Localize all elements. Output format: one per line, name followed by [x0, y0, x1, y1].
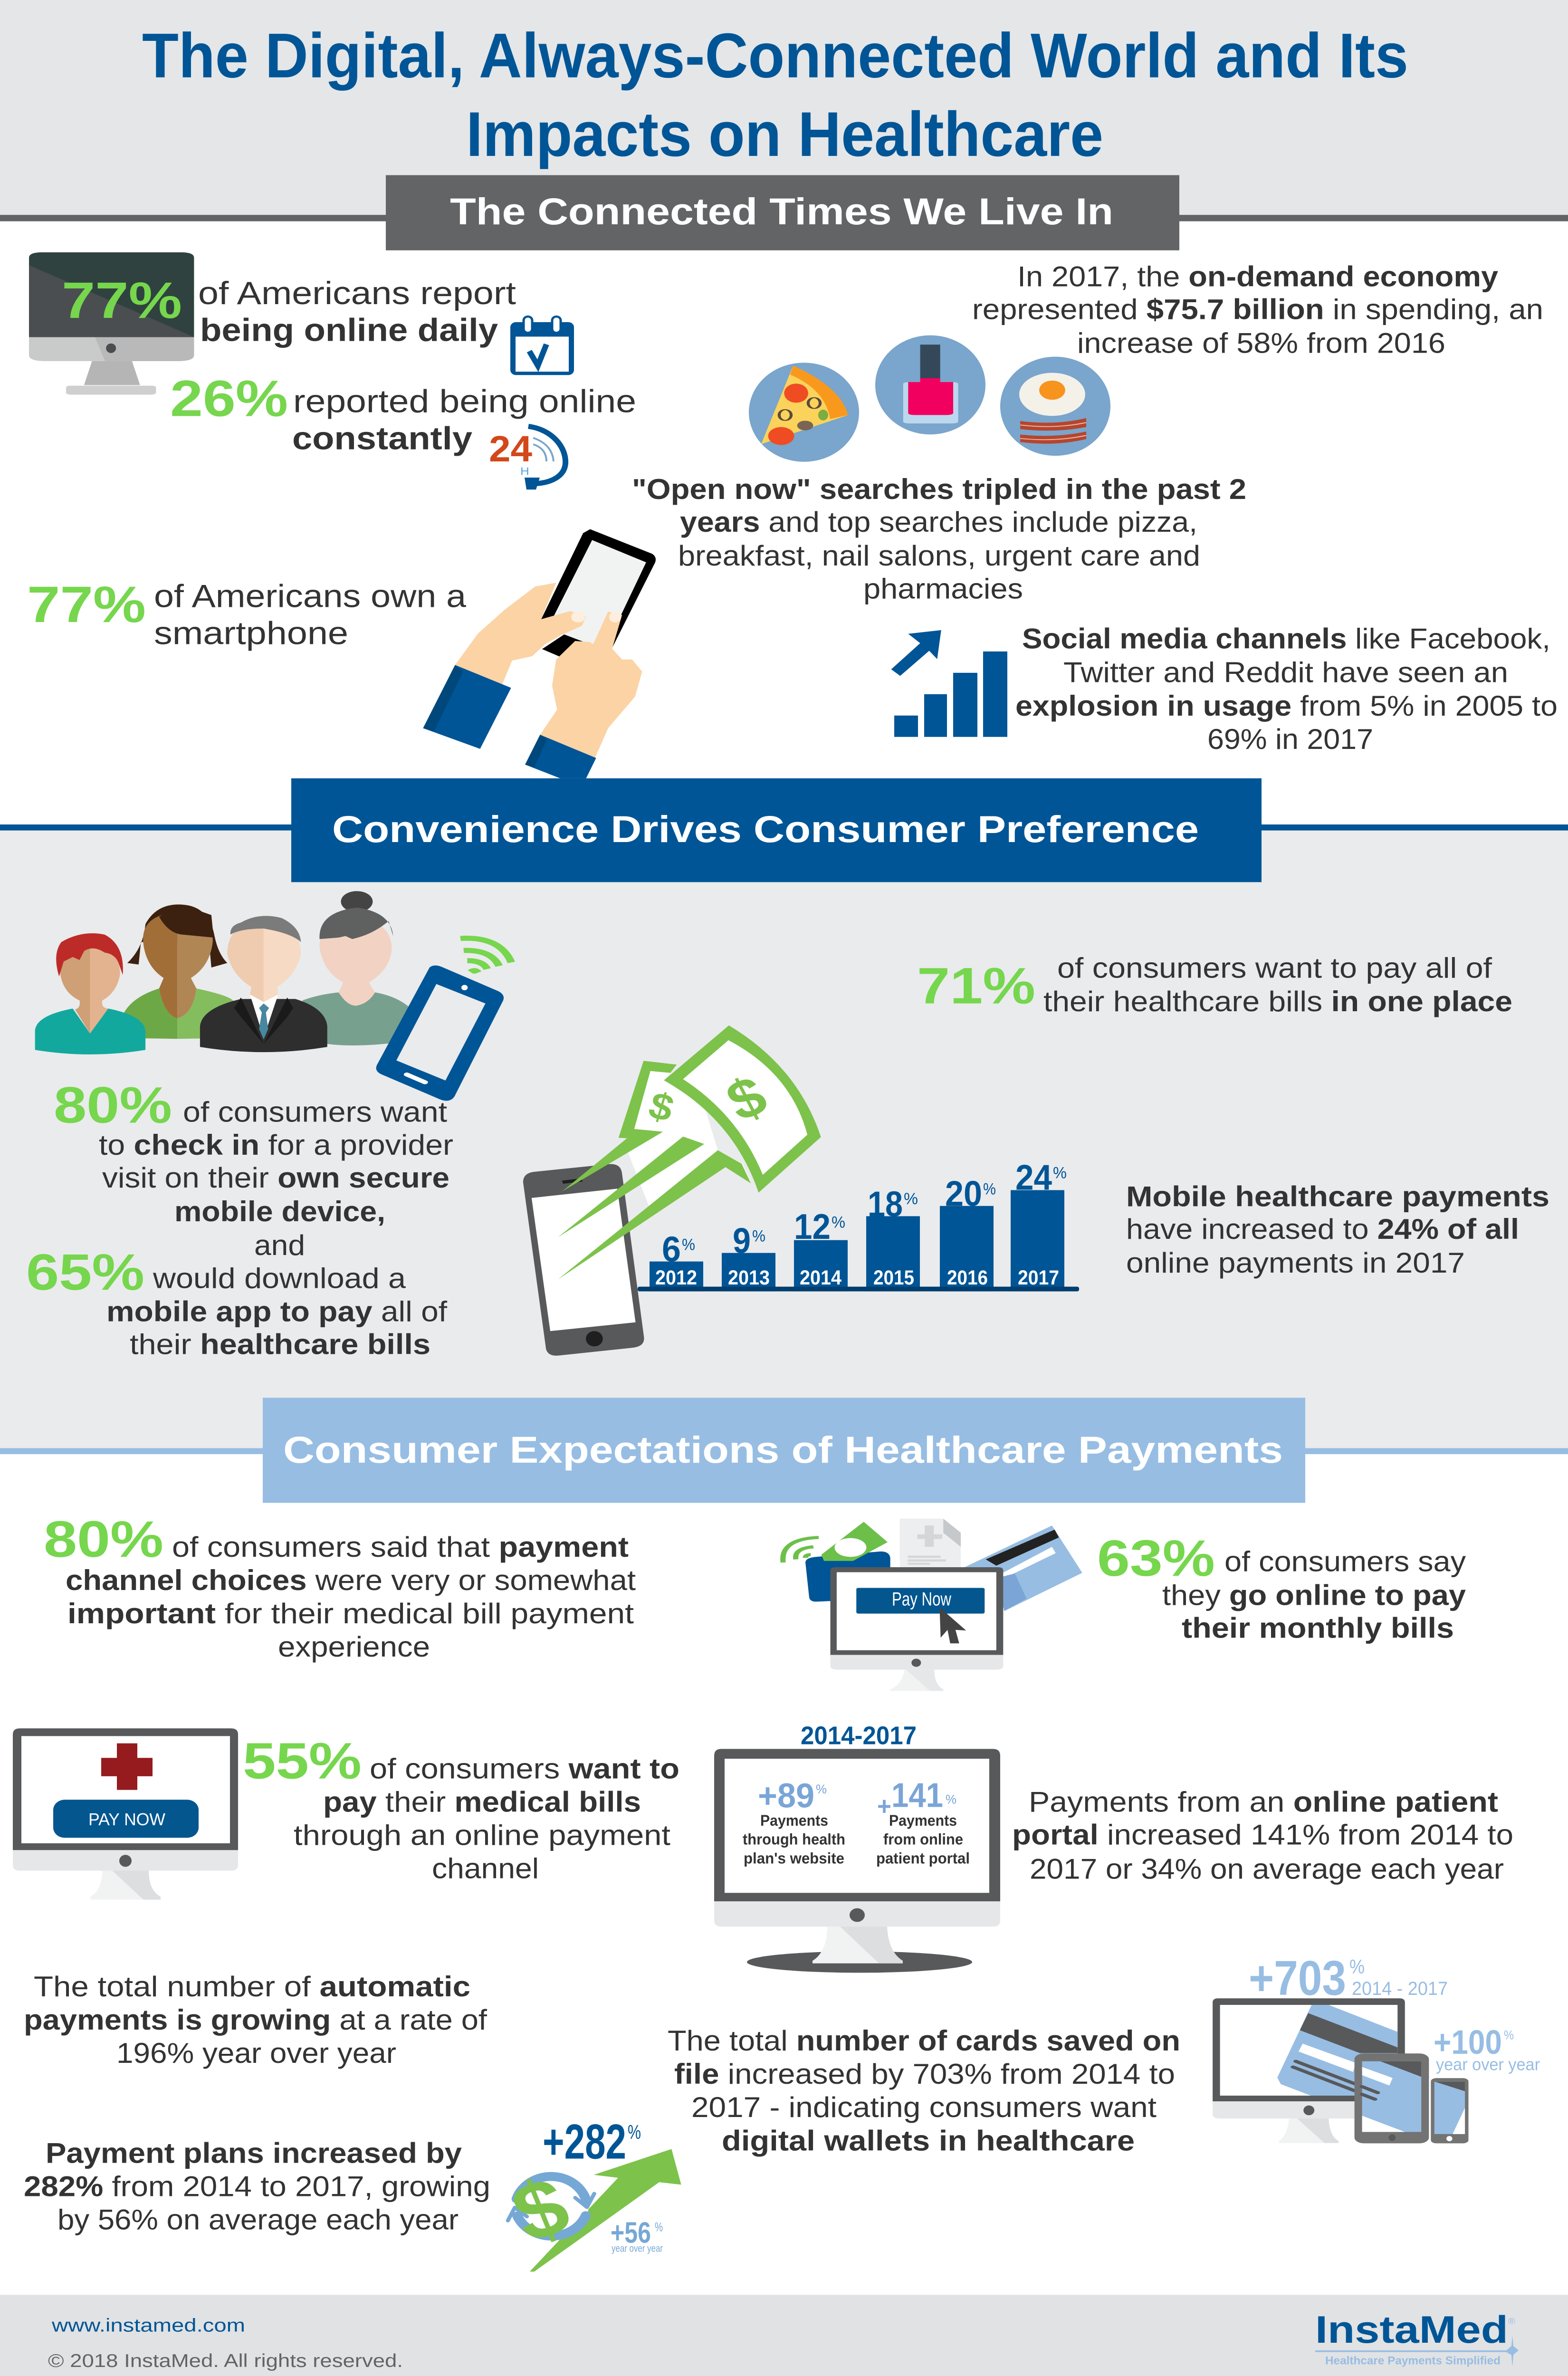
- text: social media usage: 69% in 2017: [1207, 723, 1373, 755]
- text: payment plans increase: Payment plans increased by: [46, 2137, 462, 2169]
- text: on-demand economy: increase of 58% from 2016: [1077, 327, 1445, 359]
- title: Impacts on Healthcare: [466, 99, 1103, 169]
- text: social media usage: explosion in usage from 5% in 2005 to: [1015, 690, 1558, 722]
- text: 80% check in on mobile device, 65% download app: mobile app to pay all of: [106, 1296, 447, 1328]
- year labels: 2016: [947, 1267, 988, 1289]
- stat: +141% from online patient portal: from online: [883, 1831, 963, 1848]
- text: payment plans increase: 282% from 2014 to 2017, growing: [24, 2171, 490, 2203]
- text: 63% go online to pay: 63%: [1097, 1530, 1215, 1587]
- stat: +141% from online patient portal: 141: [891, 1776, 943, 1815]
- text: 80% payment channel choices: channel choices were very or somewhat: [66, 1564, 636, 1596]
- text: cards saved on file: digital wallets in healthcare: [722, 2125, 1135, 2157]
- text: open now searches: pharmacies: [863, 573, 1023, 605]
- icon: 24 hour arrow: 24: [489, 429, 533, 469]
- value labels: 18: [868, 1184, 903, 1224]
- value labels: 24: [1015, 1158, 1052, 1198]
- icon: rising bars with arrow: [891, 630, 1007, 737]
- logo: InstaMed: ®: [1508, 2317, 1515, 2326]
- phone: [1431, 2078, 1469, 2143]
- stat: +282%: %: [628, 2121, 641, 2144]
- tablet: [1355, 2053, 1429, 2143]
- text: 80% payment channel choices: of consumers said that payment: [172, 1531, 629, 1563]
- text: 80% check in on mobile device, 65% download app: and: [254, 1229, 305, 1261]
- text: open now searches: [632, 473, 1246, 605]
- stat: +89% through health plan's website: [743, 1777, 845, 1867]
- stat: +89% through health plan's website: through health: [743, 1831, 845, 1848]
- icon: pizza: [749, 363, 859, 462]
- stat: +703% 2014 - 2017: +703: [1249, 1951, 1346, 2006]
- icon: phone sending money: $: [644, 1083, 679, 1130]
- text: 80% check in on mobile device, 65% download app: their healthcare bills: [130, 1329, 430, 1360]
- value labels: %: [983, 1179, 996, 1198]
- person: woman with teal shirt: [35, 933, 145, 1054]
- footer: website and copyright: © 2018 InstaMed. All rights reserved.: [48, 2350, 403, 2371]
- text: payment plans increase: [24, 2137, 490, 2236]
- icon: blue smartphone with wifi: [376, 938, 511, 1101]
- icon: pay now monitor with wallet, bill and card: Pay Now: [892, 1588, 952, 1610]
- text: cards saved on file: file increased by 703% from 2014 to: [674, 2058, 1175, 2090]
- text: 80% check in on mobile device, 65% download app: mobile device,: [174, 1196, 385, 1227]
- text: 71% pay in one place: 71%: [917, 958, 1035, 1015]
- stat: +100% year over year: year over year: [1436, 2055, 1540, 2074]
- heading: consumer expectations of healthcare payments: Consumer Expectations of Healthcare Payments: [283, 1428, 1283, 1471]
- icon: pay now monitor with red cross: [13, 1728, 238, 1900]
- stat: +89% through health plan's website: +89: [758, 1777, 814, 1815]
- text: 55% pay medical bills online: pay their medical bills: [323, 1786, 641, 1818]
- text: on-demand economy: In 2017, the on-demand economy: [1017, 260, 1499, 293]
- person: woman with green shirt: [119, 904, 234, 1039]
- text: 80% check in on mobile device, 65% download app: [26, 1077, 453, 1360]
- text: automatic payments growth: payments is growing at a rate of: [24, 2004, 487, 2036]
- logo: InstaMed: InstaMed: [1315, 2309, 1508, 2351]
- icon: hands holding smartphone: [423, 529, 656, 778]
- icon: desktop monitor with 77%: 77%: [62, 272, 182, 329]
- heading: the connected times we live in: [386, 175, 1179, 250]
- text: automatic payments growth: [24, 1971, 487, 2069]
- icon: pay now monitor with red cross: PAY NOW: [88, 1811, 165, 1830]
- text: 80% payment channel choices: experience: [278, 1631, 430, 1663]
- text: cards saved on file: The total number of cards saved on: [668, 2025, 1180, 2057]
- text: mobile healthcare payments: online payments in 2017: [1126, 1247, 1465, 1279]
- logo: InstaMed: Healthcare Payments Simplified: [1325, 2355, 1501, 2367]
- text: 63% go online to pay: they go online to pay: [1162, 1579, 1466, 1611]
- stat: +89% through health plan's website: plan's website: [744, 1850, 844, 1867]
- year labels: 2015: [873, 1267, 914, 1289]
- text: Americans online daily: [198, 276, 516, 348]
- text: 80% check in on mobile device, 65% download app: visit on their own secure: [102, 1162, 449, 1194]
- stat: +141% from online patient portal: Payments: [889, 1812, 957, 1830]
- text: 80% check in on mobile device, 65% download app: 80%: [54, 1077, 172, 1134]
- text: open now searches: years and top searches include pizza,: [680, 506, 1197, 538]
- icon: egg and bacon: [1000, 357, 1110, 456]
- text: online patient portal payments: [1012, 1786, 1513, 1885]
- value labels: %: [904, 1189, 918, 1208]
- footer: website and copyright: [48, 2315, 403, 2371]
- title: [142, 20, 1408, 169]
- stat: +56% year over year: year over year: [612, 2242, 663, 2254]
- icon: nail polish: [875, 335, 985, 434]
- text: mobile healthcare payments: Mobile healthcare payments: [1126, 1181, 1549, 1213]
- icon: group of people: [35, 891, 418, 1054]
- text: 63% go online to pay: of consumers say: [1224, 1545, 1466, 1578]
- bar chart: mobile healthcare payments: [638, 1158, 1079, 1292]
- value labels: %: [1053, 1163, 1067, 1182]
- value labels: 6: [662, 1229, 681, 1269]
- text: 80% check in on mobile device, 65% download app: of consumers want: [183, 1096, 447, 1128]
- year labels: 2013: [728, 1267, 770, 1289]
- text: cards saved on file: 2017 - indicating consumers want: [691, 2091, 1157, 2123]
- text: 55% pay medical bills online: of consumers want to: [370, 1753, 679, 1785]
- text: 63% go online to pay: [1097, 1530, 1466, 1644]
- logo: InstaMed: [1315, 2309, 1519, 2367]
- heading: the connected times we live in: The Connected Times We Live In: [450, 190, 1113, 232]
- person: woman with bun: [302, 891, 418, 1045]
- year labels: [655, 1267, 1059, 1289]
- value labels: 20: [945, 1174, 982, 1214]
- stat: +56% year over year: %: [655, 2220, 663, 2234]
- text: 80% payment channel choices: [44, 1511, 636, 1663]
- stat: +703% 2014 - 2017: 2014 - 2017: [1352, 1978, 1448, 1999]
- text: automatic payments growth: The total number of automatic: [34, 1971, 470, 2002]
- text: 80% check in on mobile device, 65% download app: 65%: [26, 1244, 144, 1301]
- text: social media usage: Social media channels like Facebook,: [1022, 623, 1550, 655]
- text: 26% constantly: reported being online: [293, 383, 636, 420]
- text: 77% own a smartphone: of Americans own a: [154, 578, 466, 614]
- text: on-demand economy: represented $75.7 billion in spending, an: [972, 294, 1543, 326]
- year labels: 2014: [800, 1267, 841, 1289]
- icon: dollar cycle with rising arrow: [500, 2149, 681, 2271]
- footer: website and copyright: www.instamed.com: [51, 2315, 245, 2336]
- text: 26% constantly: constantly: [292, 421, 472, 457]
- text: 80% check in on mobile device, 65% download app: would download a: [153, 1262, 406, 1294]
- stat: +141% from online patient portal: patient portal: [876, 1850, 970, 1867]
- stat: +282%: +282: [543, 2114, 626, 2169]
- text: automatic payments growth: 196% year over year: [116, 2037, 396, 2069]
- year labels: 2012: [655, 1267, 697, 1289]
- panel: monitor with payment growth figures: [714, 1749, 1000, 1973]
- text: 80% payment channel choices: 80%: [44, 1511, 163, 1568]
- icon: devices with credit card: [1213, 1998, 1469, 2143]
- text: mobile healthcare payments: have increased to 24% of all: [1126, 1213, 1519, 1245]
- icon: calendar: [510, 316, 574, 375]
- text: 63% go online to pay: their monthly bills: [1182, 1612, 1454, 1644]
- chart heading: 2014-2017: 2014-2017: [801, 1721, 917, 1750]
- text: online patient portal payments: portal increased 141% from 2014 to: [1012, 1819, 1513, 1851]
- text: online patient portal payments: 2017 or 34% on average each year: [1030, 1853, 1504, 1885]
- text: 26% constantly: 26%: [170, 370, 288, 427]
- text: open now searches: breakfast, nail salons, urgent care and: [678, 540, 1200, 572]
- text: 77% own a smartphone: 77%: [27, 576, 146, 633]
- stat: +141% from online patient portal: [876, 1776, 970, 1867]
- icon: 24 hour arrow: H: [520, 466, 529, 478]
- stat: +56% year over year: +56: [611, 2216, 651, 2249]
- text: 26% constantly: [170, 370, 636, 457]
- stat: +100% year over year: %: [1504, 2028, 1514, 2042]
- icon: desktop monitor with 77%: [29, 252, 194, 395]
- text: online patient portal payments: Payments from an online patient: [1029, 1786, 1498, 1818]
- value labels: 9: [733, 1221, 751, 1261]
- stat: +141% from online patient portal: +: [877, 1792, 891, 1820]
- text: 77% own a smartphone: [27, 576, 466, 651]
- text: payment plans increase: by 56% on average each year: [57, 2204, 459, 2236]
- text: social media usage: [1015, 623, 1558, 755]
- value labels: [662, 1158, 1067, 1269]
- person: man in suit: [200, 916, 327, 1052]
- text: open now searches: "Open now" searches tripled in the past 2: [632, 473, 1246, 505]
- text: 77% own a smartphone: smartphone: [154, 615, 348, 651]
- stat: +89% through health plan's website: Payments: [760, 1812, 828, 1830]
- stat: +703% 2014 - 2017: %: [1349, 1956, 1365, 1978]
- stat: +100% year over year: [1434, 2023, 1540, 2074]
- icon: dollar cycle with rising arrow: $: [500, 2159, 582, 2260]
- icon: 24 hour arrow: [489, 426, 565, 489]
- heading: consumer expectations of healthcare payments: [263, 1398, 1305, 1503]
- value labels: 12: [794, 1207, 831, 1246]
- text: 80% check in on mobile device, 65% download app: to check in for a provider: [99, 1129, 453, 1161]
- text: 71% pay in one place: of consumers want to pay all of: [1057, 952, 1492, 984]
- stat: +703% 2014 - 2017: [1249, 1951, 1448, 2006]
- stat: +100% year over year: +100: [1434, 2023, 1502, 2061]
- stat: +141% from online patient portal: %: [946, 1792, 956, 1807]
- text: on-demand economy: [972, 260, 1543, 359]
- icon: phone sending money: $: [717, 1064, 777, 1133]
- text: 71% pay in one place: [917, 952, 1512, 1017]
- text: mobile healthcare payments: [1126, 1181, 1549, 1279]
- icon: pay now monitor with wallet, bill and card: [783, 1519, 1082, 1691]
- text: 71% pay in one place: their healthcare bills in one place: [1043, 986, 1512, 1017]
- value labels: %: [752, 1226, 765, 1245]
- value labels: %: [832, 1213, 845, 1231]
- heading: convenience drives consumer preference: Convenience Drives Consumer Preference: [332, 808, 1199, 850]
- text: 55% pay medical bills online: channel: [432, 1853, 539, 1885]
- text: 55% pay medical bills online: through an online payment: [294, 1820, 670, 1851]
- value labels: %: [682, 1235, 695, 1254]
- text: Americans online daily: being online daily: [200, 312, 498, 348]
- text: 55% pay medical bills online: [243, 1733, 679, 1885]
- heading: convenience drives consumer preference: [291, 778, 1262, 882]
- text: 80% payment channel choices: important for their medical bill payment: [67, 1598, 634, 1629]
- text: cards saved on file: [668, 2025, 1180, 2157]
- text: Americans online daily: of Americans report: [198, 276, 516, 311]
- year labels: 2017: [1018, 1267, 1059, 1289]
- text: social media usage: Twitter and Reddit have seen an: [1063, 657, 1508, 689]
- stat: +89% through health plan's website: %: [816, 1782, 827, 1796]
- icon: phone sending money: [523, 1025, 821, 1356]
- text: 55% pay medical bills online: 55%: [243, 1733, 362, 1790]
- bars: [650, 1190, 1064, 1292]
